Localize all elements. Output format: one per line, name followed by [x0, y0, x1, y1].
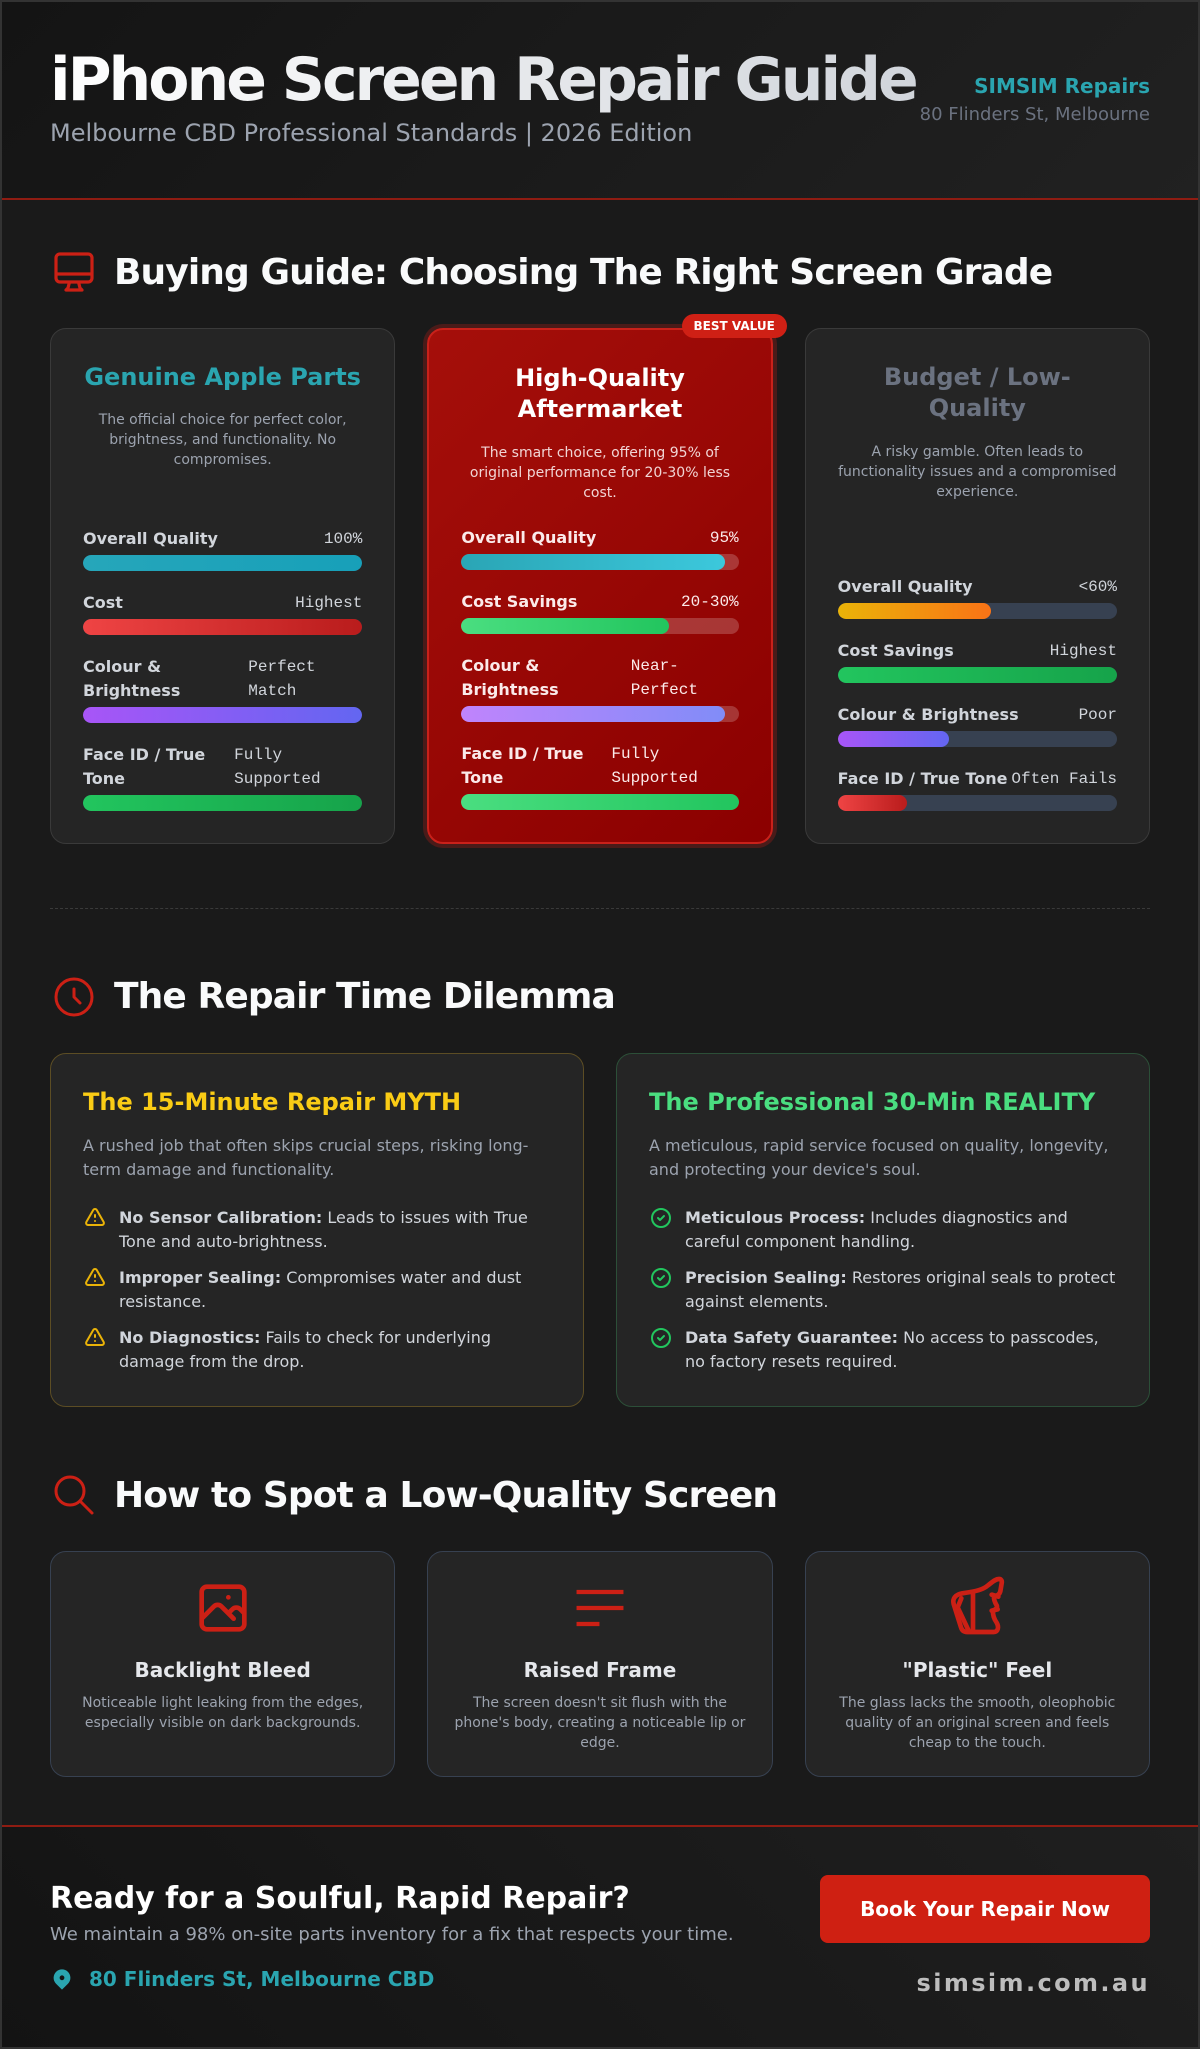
metric: cost: Cost	[83, 593, 123, 612]
metric: face id	[838, 769, 1117, 811]
card title: High-Quality Aftermarket	[515, 364, 685, 423]
panel heading: The Professional 30-Min REALITY	[649, 1088, 1095, 1116]
card description: The official choice for perfect color, brightness, and functionality. No compromises.	[99, 412, 347, 468]
icon: lines	[576, 1590, 624, 1626]
brand block	[920, 74, 1150, 125]
icon: clock	[54, 978, 94, 1016]
metric: face id: Fully Supported	[611, 745, 698, 787]
panel description: A rushed job that often skips crucial steps, risking long-term damage and functionality.	[83, 1136, 528, 1179]
metric: face id	[461, 744, 739, 810]
metric: colour and brightness: Poor	[1079, 706, 1117, 724]
metric: face id: Face ID / True Tone	[83, 745, 205, 788]
metric: overall quality: Overall Quality	[838, 577, 973, 596]
warning item: No Diagnostics: Fails to check for underlying damage from the drop.	[119, 1328, 491, 1371]
location	[54, 1967, 434, 1991]
metric: colour and brightness: Colour & Brightness	[461, 656, 559, 699]
metric: colour and brightness: Colour & Brightness	[83, 657, 180, 700]
panel: backlight bleed	[50, 1551, 395, 1777]
metric: face id: Face ID / True Tone	[461, 744, 584, 787]
icon: hand	[951, 1576, 1004, 1634]
metric: colour and brightness: Colour & Brightness	[838, 705, 1019, 724]
card heading: Raised Frame	[524, 1658, 676, 1682]
subtitle: Melbourne CBD Professional Standards | 2026 Edition	[50, 119, 692, 147]
title: iPhone Screen Repair Guide	[50, 45, 916, 115]
heading text: How to Spot a Low-Quality Screen	[114, 1475, 777, 1516]
badge: best value: BEST VALUE	[694, 319, 775, 333]
metric: cost savings: Cost Savings	[838, 641, 954, 660]
metric: overall quality: Overall Quality	[83, 529, 218, 548]
warning item: No Sensor Calibration: Leads to issues with True Tone and auto-brightness.	[119, 1208, 528, 1251]
card text: The glass lacks the smooth, oleophobic quality of an original screen and feels cheap to the touch.	[839, 1695, 1115, 1751]
header	[0, 0, 1200, 200]
metric: cost savings	[838, 641, 1117, 683]
section heading: spot low quality	[54, 1475, 777, 1516]
card text: Noticeable light leaking from the edges, especially visible on dark backgrounds.	[82, 1695, 363, 1731]
panel: high-quality aftermarket	[427, 328, 773, 844]
metric: overall quality	[83, 529, 362, 571]
panel: professional reality	[616, 1053, 1150, 1407]
check item: Precision Sealing: Restores original seals to protect against elements.	[685, 1268, 1115, 1311]
card text: The screen doesn't sit flush with the phone's body, creating a noticeable lip or edge.	[455, 1695, 745, 1751]
icon: magnifier	[54, 1476, 94, 1515]
metric: cost savings	[461, 592, 739, 634]
panel: 15-minute myth	[50, 1053, 584, 1407]
card title: Genuine Apple Parts	[84, 363, 361, 391]
warning item: Improper Sealing: Compromises water and dust resistance.	[119, 1268, 521, 1311]
check item: Meticulous Process: Includes diagnostics and careful component handling.	[685, 1208, 1068, 1251]
check item: Data Safety Guarantee: No access to passcodes, no factory resets required.	[685, 1328, 1099, 1371]
metric: colour and brightness	[83, 657, 362, 723]
card description: The smart choice, offering 95% of original performance for 20-30% less cost.	[470, 445, 730, 501]
metric: face id	[83, 745, 362, 811]
metric: face id: Often Fails	[1011, 770, 1117, 788]
metric: cost savings: Highest	[1050, 642, 1117, 660]
website: simsim.com.au	[917, 1969, 1150, 1997]
metric: face id: Fully Supported	[234, 746, 321, 788]
heading text: Buying Guide: Choosing The Right Screen Grade	[114, 252, 1052, 293]
metric: face id: Face ID / True Tone	[838, 769, 1007, 788]
metric: overall quality: <60%	[1079, 578, 1117, 596]
icon: pin	[54, 1969, 70, 1990]
metric: overall quality	[461, 528, 739, 570]
metric: overall quality: 95%	[710, 529, 739, 547]
card description: A risky gamble. Often leads to functionality issues and a compromised experience.	[838, 444, 1117, 500]
footer	[0, 1825, 1200, 2049]
metric: colour and brightness: Near-Perfect	[631, 657, 698, 699]
brand block: 80 Flinders St, Melbourne	[920, 104, 1150, 125]
metric: overall quality: Overall Quality	[461, 528, 596, 547]
metric bars	[838, 577, 1117, 811]
address: 80 Flinders St, Melbourne CBD	[89, 1967, 434, 1991]
card title: Budget / Low-Quality	[884, 363, 1071, 422]
metric: overall quality: 100%	[324, 530, 362, 548]
panel heading: The 15-Minute Repair MYTH	[83, 1088, 461, 1116]
metric: overall quality	[838, 577, 1117, 619]
panel: plastic feel	[805, 1551, 1150, 1777]
icon: image	[199, 1584, 247, 1632]
metric: colour and brightness: Perfect Match	[248, 658, 316, 700]
panel description: A meticulous, rapid service focused on quality, longevity, and protecting your device's soul.	[649, 1136, 1108, 1179]
metric: colour and brightness	[838, 705, 1117, 747]
section heading: repair time dilemma	[54, 976, 615, 1017]
brand block: SIMSIM Repairs	[974, 74, 1150, 98]
card heading: "Plastic" Feel	[902, 1658, 1052, 1682]
badge: best value	[682, 314, 787, 338]
metric: cost: Highest	[295, 594, 362, 612]
panel: raised frame	[427, 1551, 773, 1777]
panel: genuine apple parts	[50, 328, 395, 844]
metric: cost savings: Cost Savings	[461, 592, 577, 611]
panel: budget low-quality	[805, 328, 1150, 844]
metric: cost savings: 20-30%	[681, 593, 739, 611]
metric bars	[83, 529, 362, 811]
card heading: Backlight Bleed	[135, 1658, 311, 1682]
heading text: The Repair Time Dilemma	[114, 976, 615, 1017]
section heading: buying guide	[54, 252, 1052, 293]
button: Book Your Repair Now	[860, 1897, 1110, 1921]
metric: cost	[83, 593, 362, 635]
metric: colour and brightness	[461, 656, 739, 722]
metric bars	[461, 528, 739, 810]
footer heading: Ready for a Soulful, Rapid Repair?	[50, 1881, 630, 1916]
footer text: We maintain a 98% on-site parts inventory for a fix that respects your time.	[50, 1924, 734, 1945]
button	[820, 1875, 1150, 1943]
icon: monitor	[54, 252, 94, 292]
